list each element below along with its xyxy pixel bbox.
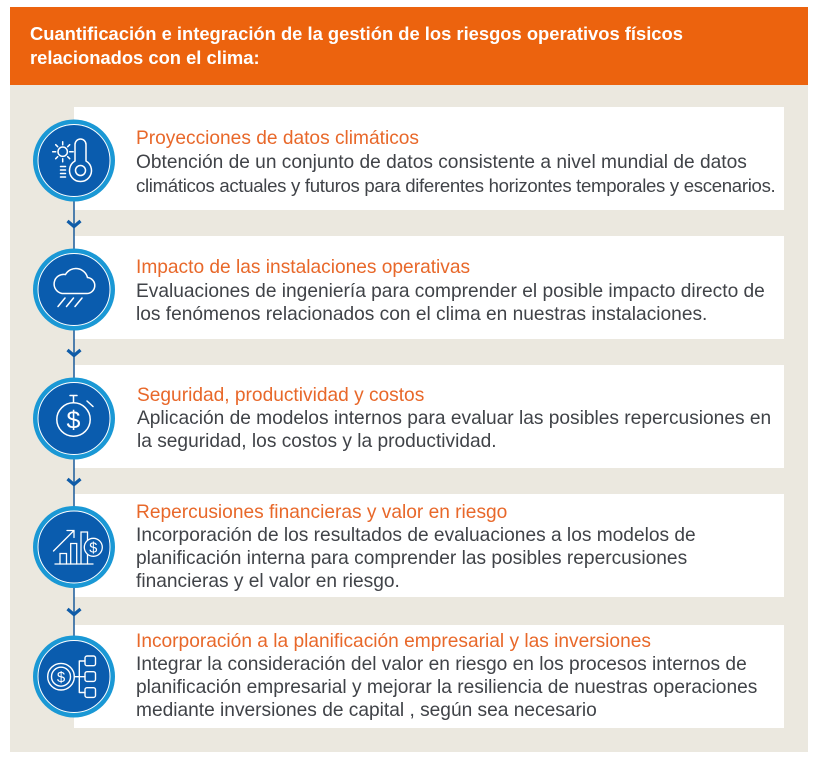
arrow 1 <box>68 221 80 226</box>
heading 2: Impacto de las instalaciones operativas <box>136 257 470 278</box>
body 3: la seguridad, los costos y la productividad. <box>137 431 497 452</box>
body 5: planificación empresarial y mejorar la resiliencia de nuestras operaciones <box>136 677 757 698</box>
header banner <box>10 7 808 85</box>
heading 1: Proyecciones de datos climáticos <box>136 128 419 149</box>
body 2: Evaluaciones de ingeniería para comprender el posible impacto directo de <box>136 281 765 302</box>
body 3: Aplicación de modelos internos para evaluar las posibles repercusiones en <box>137 408 771 429</box>
title <box>30 23 683 68</box>
icon: rain cloud <box>33 248 115 330</box>
title: relacionados con el clima: <box>30 47 260 68</box>
body 3 <box>137 408 771 452</box>
card 3: safety <box>74 365 784 468</box>
body 1 <box>136 152 775 196</box>
body 4: financieras y el valor en riesgo. <box>136 571 400 592</box>
icon: dollar hierarchy <box>33 636 115 718</box>
body 2: los fenómenos relacionados con el clima en nuestras instalaciones. <box>136 304 707 325</box>
card 5: planning <box>74 625 784 728</box>
body 5: mediante inversiones de capital , según sea necesario <box>136 700 597 721</box>
heading 3: Seguridad, productividad y costos <box>137 385 424 406</box>
icon: bar chart with dollar <box>33 506 115 588</box>
icon: thermometer and sun <box>33 120 115 202</box>
title: Cuantificación e integración de la gestión de los riesgos operativos físicos <box>30 23 683 44</box>
arrow 4 <box>68 609 80 614</box>
card 4: financial <box>74 494 784 597</box>
body 5 <box>136 654 757 721</box>
icon: stopwatch with dollar <box>33 378 115 460</box>
body 4: Incorporación de los resultados de evaluaciones a los modelos de <box>136 525 696 546</box>
card 2: operating facilities <box>74 236 784 339</box>
arrow 3 <box>68 479 80 484</box>
heading 4: Repercusiones financieras y valor en riesgo <box>136 502 507 523</box>
body 5: Integrar la consideración del valor en riesgo en los procesos internos de <box>136 654 747 675</box>
icon: dollar hierarchy: $ <box>57 669 66 686</box>
arrow 2 <box>68 350 80 356</box>
card 1: climate data <box>74 107 784 210</box>
heading 5: Incorporación a la planificación empresarial y las inversiones <box>136 631 651 652</box>
body 4 <box>136 525 696 592</box>
body 2 <box>136 281 765 325</box>
icon: stopwatch with dollar: $ <box>67 406 81 434</box>
body 1: Obtención de un conjunto de datos consistente a nivel mundial de datos <box>136 152 747 173</box>
connector line <box>73 200 75 636</box>
body 1: climáticos actuales y futuros para diferentes horizontes temporales y escenarios. <box>136 175 775 196</box>
body 4: planificación interna para comprender las posibles repercusiones <box>136 548 687 569</box>
icon: bar chart with dollar: $ <box>89 540 97 556</box>
